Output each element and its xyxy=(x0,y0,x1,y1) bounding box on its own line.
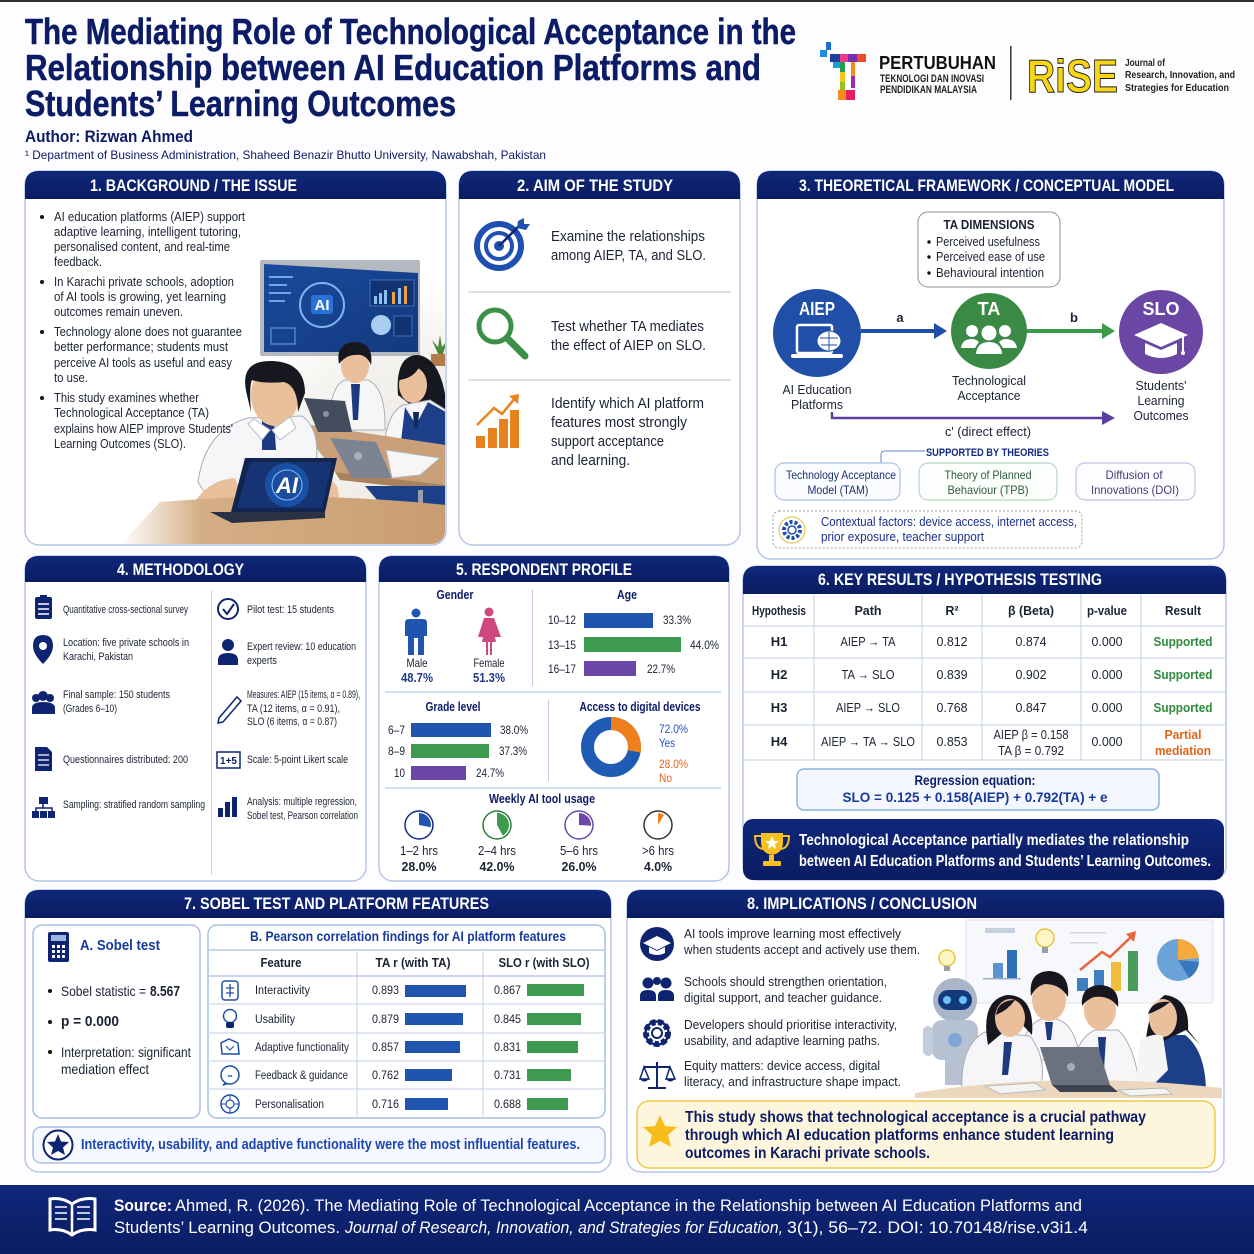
results table: H4 xyxy=(771,734,788,749)
results table xyxy=(744,594,1225,760)
header 4: 4. METHODOLOGY xyxy=(117,560,245,579)
row: adaptive functionality: Adaptive functionality xyxy=(255,1042,349,1054)
results table: 0.902 xyxy=(1016,667,1046,682)
row: adaptive functionality: 0.857 xyxy=(372,1040,399,1054)
aim text 1 xyxy=(551,229,706,264)
method: location xyxy=(33,635,189,664)
logo: Pertubuhan: TEKNOLOGI DAN INOVASI xyxy=(880,73,984,85)
influential features callout: Interactivity, usability, and adaptive functionality were the most influential features. xyxy=(81,1137,580,1153)
results table: p-value xyxy=(1087,604,1127,618)
method: scale: Scale: 5-point Likert scale xyxy=(247,754,348,766)
grade bars xyxy=(388,700,528,780)
header 8 xyxy=(627,890,1224,918)
logo: RISE journal: RiSE xyxy=(1027,50,1118,102)
bulleted text: outcomes remain uneven. xyxy=(54,304,183,319)
aim text 2 xyxy=(551,319,706,354)
row: feedback and guidance: ∞ xyxy=(228,1073,232,1080)
logo: Pertubuhan xyxy=(820,42,996,100)
node: AIEP: Platforms xyxy=(791,397,843,412)
footer: source citation: Journal of Research, Innovation, and Strategies for Education, xyxy=(344,1218,783,1237)
node: TA xyxy=(951,293,1027,403)
bulleted text: better performance; students must xyxy=(54,339,228,354)
title: The Mediating Role of Technological Acceptance in the xyxy=(25,11,796,52)
panel 1: background xyxy=(25,171,447,545)
logo: RISE journal: Strategies for Education xyxy=(1125,82,1229,94)
gender chart: Male xyxy=(406,656,428,670)
results table: mediation xyxy=(1155,743,1211,758)
node: SLO: SLO xyxy=(1142,299,1180,319)
pearson correlation table: Feature xyxy=(260,955,302,970)
method: sampling: Sampling: stratified random sampling xyxy=(63,799,205,811)
node: TA: Technological xyxy=(952,373,1026,388)
pearson correlation table: SLO r (with SLO) xyxy=(498,955,590,970)
title: Students’ Learning Outcomes xyxy=(25,83,456,124)
results table: β (Beta) xyxy=(1008,604,1054,618)
illustration: students with AI laptops: AI xyxy=(275,473,299,498)
node: TA: TA xyxy=(978,299,1000,319)
method: location: Karachi, Pakistan xyxy=(63,651,133,663)
header 6 xyxy=(743,566,1226,594)
theories heading: SUPPORTED BY THEORIES xyxy=(926,447,1049,459)
results table: 0.000 xyxy=(1092,667,1122,682)
grade bars: 8–9 xyxy=(388,744,405,758)
method: scale xyxy=(217,752,348,768)
weekly usage: 28.0% xyxy=(402,859,437,874)
logo: RISE journal: Research, Innovation, and xyxy=(1125,69,1235,81)
device access donut: 72.0% xyxy=(659,722,688,736)
method: survey: Quantitative cross-sectional survey xyxy=(63,604,188,616)
regression equation xyxy=(797,769,1159,810)
gender chart: 51.3% xyxy=(473,670,505,685)
bulleted text: adaptive learning, intelligent tutoring, xyxy=(54,224,241,239)
results table: 0.847 xyxy=(1016,700,1046,715)
implication 4 xyxy=(640,1058,901,1089)
row: interactivity: 0.867 xyxy=(494,983,521,997)
grade bars: Grade level xyxy=(426,700,480,714)
bulleted text: Technological Acceptance (TA) xyxy=(54,405,209,420)
title: Relationship between AI Education Platforms and xyxy=(25,47,761,88)
arrow a: a xyxy=(896,310,904,325)
weekly usage: 26.0% xyxy=(562,859,597,874)
contextual factors xyxy=(773,511,1082,548)
header 3: 3. THEORETICAL FRAMEWORK / CONCEPTUAL MODEL xyxy=(799,176,1174,195)
sobel test box: A. Sobel test xyxy=(80,937,160,954)
illustration: students with AI laptops xyxy=(120,260,447,545)
theory: DOI: Diffusion of xyxy=(1106,468,1163,482)
row: usability: 0.845 xyxy=(494,1012,521,1026)
row: feedback and guidance: 0.762 xyxy=(372,1068,399,1082)
weekly usage xyxy=(400,792,674,874)
theory: TPB: Theory of Planned xyxy=(944,468,1032,482)
results table: TA → SLO xyxy=(842,667,894,682)
results table: 0.000 xyxy=(1092,634,1122,649)
panel 7: sobel and features xyxy=(25,890,611,1172)
weekly usage: Weekly AI tool usage xyxy=(489,792,595,806)
row: usability: Usability xyxy=(255,1014,295,1026)
row: personalisation: 0.716 xyxy=(372,1097,399,1111)
results table: Supported xyxy=(1154,634,1213,649)
theory: DOI xyxy=(1076,463,1195,500)
results table: H3 xyxy=(771,700,787,715)
method: location: Location: five private schools in xyxy=(63,637,189,649)
implication 2: digital support, and teacher guidance. xyxy=(684,990,882,1005)
row: usability: 0.879 xyxy=(372,1012,399,1026)
row: adaptive functionality xyxy=(221,1039,578,1054)
gender chart: Female xyxy=(474,656,505,670)
conclusion box: This study shows that technological acceptance is a crucial pathway xyxy=(685,1109,1146,1126)
method: sampling xyxy=(32,797,205,818)
results table: H1 xyxy=(771,634,787,649)
panel 8: implications xyxy=(627,890,1224,1172)
method: questionnaires: Questionnaires distributed: 200 xyxy=(63,754,188,766)
footer: source citation xyxy=(0,1185,1254,1254)
aim text 3: support acceptance xyxy=(551,434,664,450)
method: survey xyxy=(35,595,188,619)
bulleted text: Technology alone does not guarantee xyxy=(54,324,242,339)
weekly usage: 1–2 hrs xyxy=(400,843,438,858)
method: scale: 1+5 xyxy=(220,756,237,767)
device access donut: 28.0% xyxy=(659,757,688,771)
bulleted text: of AI tools is growing, yet learning xyxy=(54,289,226,304)
mediation banner: Technological Acceptance partially mediates the relationship xyxy=(799,832,1189,849)
results table: 0.874 xyxy=(1016,634,1046,649)
TA dimensions box: Perceived ease of use xyxy=(936,250,1045,264)
results table: AIEP → TA → SLO xyxy=(821,734,915,749)
header 5 xyxy=(379,556,729,582)
implication 2 xyxy=(640,974,887,1005)
theory: DOI: Innovations (DOI) xyxy=(1091,483,1179,497)
results table: Supported xyxy=(1154,667,1213,682)
row: personalisation: 0.688 xyxy=(494,1097,521,1111)
results table: TA β = 0.792 xyxy=(998,743,1064,758)
node: SLO: Outcomes xyxy=(1134,408,1189,423)
method: sample: (Grades 6–10) xyxy=(63,703,117,715)
results table: R² xyxy=(945,604,959,618)
method: pilot: Pilot test: 15 students xyxy=(247,604,334,616)
age bars xyxy=(548,588,719,676)
bulleted text xyxy=(40,209,245,451)
grade bars: 10 xyxy=(394,766,405,780)
weekly usage: >6 hrs xyxy=(642,843,674,858)
theory: TAM: Technology Acceptance xyxy=(786,468,896,482)
theory: TAM: Model (TAM) xyxy=(808,483,868,497)
weekly usage: 5–6 hrs xyxy=(560,843,598,858)
results table: 0.000 xyxy=(1092,734,1122,749)
method: sample xyxy=(32,689,170,715)
footer: source citation: Students’ Learning Outcomes. xyxy=(114,1218,340,1237)
weekly usage: 42.0% xyxy=(480,859,515,874)
header 8: 8. IMPLICATIONS / CONCLUSION xyxy=(747,894,977,913)
method: measures: TA (12 items, α = 0.91), xyxy=(247,703,340,715)
panel 4: methodology xyxy=(25,556,366,881)
grade bars: 37.3% xyxy=(499,744,527,758)
method: analysis: Analysis: multiple regression, xyxy=(247,796,357,808)
bulleted text: explains how AIEP improve Students' xyxy=(54,421,233,436)
theories heading xyxy=(881,447,1049,463)
row: interactivity xyxy=(222,981,584,1000)
bulleted text: In Karachi private schools, adoption xyxy=(54,274,234,289)
header 5: 5. RESPONDENT PROFILE xyxy=(456,560,632,579)
node: SLO: Students' xyxy=(1136,378,1186,393)
device access donut: Yes xyxy=(659,736,675,750)
TA dimensions box: Perceived usefulness xyxy=(936,235,1040,249)
logo: RISE journal: Journal of xyxy=(1125,57,1165,69)
arrow b: b xyxy=(1070,310,1078,325)
pearson correlation table: TA r (with TA) xyxy=(376,955,450,970)
method: questionnaires xyxy=(35,747,188,771)
footer: source citation: Source: xyxy=(114,1196,172,1215)
implication 1: when students accept and actively use them. xyxy=(683,942,920,957)
affiliation: ¹ Department of Business Administration, Shaheed Benazir Bhutto University, Nawabshah, Pakistan xyxy=(25,148,546,162)
age bars: 16–17 xyxy=(548,662,576,676)
results table: AIEP → SLO xyxy=(836,700,900,715)
row: interactivity: Interactivity xyxy=(255,985,310,997)
theory: TAM xyxy=(775,463,900,500)
method: analysis xyxy=(218,796,358,822)
results table: Supported xyxy=(1154,700,1213,715)
gender chart xyxy=(401,588,505,685)
implication 3: Developers should prioritise interactivity, xyxy=(684,1017,897,1032)
influential features callout xyxy=(33,1127,605,1163)
arrow b xyxy=(1027,310,1115,339)
row: interactivity: 0.893 xyxy=(372,983,399,997)
weekly usage: 4.0% xyxy=(644,859,672,874)
footer: source citation: Ahmed, R. (2026). The Mediating Role of Technological Acceptance in the Relationship between AI Education Platforms and xyxy=(175,1196,1082,1215)
age bars: 13–15 xyxy=(548,638,576,652)
method: expert xyxy=(218,639,356,667)
TA dimensions box: Behavioural intention xyxy=(936,266,1044,280)
gender chart: 48.7% xyxy=(401,670,433,685)
title xyxy=(25,11,796,124)
contextual factors: Contextual factors: device access, internet access, xyxy=(821,515,1077,529)
results table: Hypothesis xyxy=(752,604,806,618)
header 3 xyxy=(757,171,1224,199)
sobel test box: 8.567 xyxy=(150,984,180,1000)
aim text 2: the effect of AIEP on SLO. xyxy=(551,338,706,354)
results table: AIEP → TA xyxy=(840,634,896,649)
node: TA: Acceptance xyxy=(958,388,1020,403)
implication 2: Schools should strengthen orientation, xyxy=(684,974,887,989)
conclusion box: through which AI education platforms enhance student learning xyxy=(685,1127,1114,1144)
aim text 3 xyxy=(551,396,704,469)
node: SLO: Learning xyxy=(1138,393,1184,408)
device access donut xyxy=(580,700,701,785)
device access donut: Access to digital devices xyxy=(580,700,701,714)
sobel test box: Interpretation: significant xyxy=(61,1044,191,1060)
icon: growth chart xyxy=(476,394,519,448)
sobel test box: p = 0.000 xyxy=(61,1014,119,1030)
illustration: students with AI laptops: AI xyxy=(314,297,330,314)
node: SLO xyxy=(1119,290,1203,423)
bulleted text: personalised content, and real-time xyxy=(54,239,230,254)
icon: magnifier xyxy=(479,310,525,356)
results table: 0.768 xyxy=(936,700,968,715)
row: usability xyxy=(224,1010,581,1028)
theory: TPB xyxy=(919,463,1057,500)
age bars: 22.7% xyxy=(647,662,675,676)
node: AIEP: AI Education xyxy=(782,382,852,397)
implication 4: literacy, and infrastructure shape impact. xyxy=(684,1074,901,1089)
pearson correlation table xyxy=(208,925,605,1118)
gender chart: Gender xyxy=(436,588,474,602)
grade bars: 24.7% xyxy=(476,766,504,780)
icon: open book xyxy=(50,1199,95,1235)
method: expert: experts xyxy=(247,655,277,667)
aim text 3: and learning. xyxy=(551,453,630,469)
age bars: 33.3% xyxy=(663,613,691,627)
sobel test box xyxy=(33,925,200,1118)
results table: AIEP β = 0.158 xyxy=(994,727,1068,742)
age bars: 44.0% xyxy=(690,638,719,652)
implication 3 xyxy=(646,1017,897,1048)
conclusion box xyxy=(637,1101,1215,1168)
mediation banner xyxy=(743,819,1224,880)
grade bars: 6–7 xyxy=(388,723,405,737)
age bars: Age xyxy=(617,588,637,602)
TA dimensions box xyxy=(918,212,1060,287)
author: Author: Rizwan Ahmed xyxy=(25,127,193,146)
sobel test box: Sobel statistic = xyxy=(61,983,146,999)
method: analysis: Sobel test, Pearson correlation xyxy=(247,810,358,822)
header 7 xyxy=(25,890,611,918)
regression equation: SLO = 0.125 + 0.158(AIEP) + 0.792(TA) + e xyxy=(842,790,1108,805)
header 1 xyxy=(25,171,446,199)
header 1: 1. BACKGROUND / THE ISSUE xyxy=(90,176,297,195)
bulleted text: AI education platforms (AIEP) support xyxy=(54,209,245,224)
header 4 xyxy=(25,556,366,582)
results table: 0.853 xyxy=(936,734,968,749)
logo: RISE journal xyxy=(1027,50,1235,102)
results table: H2 xyxy=(771,667,787,682)
panel 6: key results xyxy=(743,566,1226,880)
TA dimensions box: TA DIMENSIONS xyxy=(944,218,1034,232)
panel 5: respondent profile xyxy=(379,556,729,881)
bulleted text: perceive AI tools as useful and easy xyxy=(54,355,232,370)
bulleted text: This study examines whether xyxy=(54,390,200,405)
age bars: 10–12 xyxy=(548,613,576,627)
icon: target xyxy=(477,218,530,268)
results table: Partial xyxy=(1164,727,1202,742)
row: personalisation xyxy=(221,1095,568,1113)
row: feedback and guidance xyxy=(221,1066,571,1086)
node: AIEP xyxy=(773,289,861,412)
footer: source citation: 3(1), 56–72. DOI: 10.70148/rise.v3i1.4 xyxy=(787,1218,1088,1237)
theory: TPB: Behaviour (TPB) xyxy=(948,483,1028,497)
logo: Pertubuhan: PERTUBUHAN xyxy=(879,53,996,73)
grade bars: 38.0% xyxy=(500,723,528,737)
row: adaptive functionality: 0.831 xyxy=(494,1040,521,1054)
sobel test box: mediation effect xyxy=(61,1061,149,1077)
implication 3: usability, and adaptive learning paths. xyxy=(684,1033,880,1048)
method: measures xyxy=(218,689,360,728)
bulleted text: to use. xyxy=(54,370,88,385)
device access donut: No xyxy=(659,771,672,785)
regression equation: Regression equation: xyxy=(914,773,1036,788)
implication 1 xyxy=(640,926,920,961)
method: expert: Expert review: 10 education xyxy=(247,641,356,653)
bulleted text: feedback. xyxy=(54,254,102,269)
row: personalisation: Personalisation xyxy=(255,1099,324,1111)
results table: Result xyxy=(1165,604,1202,618)
results table: 0.839 xyxy=(936,667,968,682)
method: measures: Measures: AIEP (15 items, α = 0.89), xyxy=(247,689,360,701)
header 2: 2. AIM OF THE STUDY xyxy=(517,176,674,195)
method: measures: SLO (6 items, α = 0.87) xyxy=(247,716,337,728)
node: AIEP: AIEP xyxy=(799,299,835,319)
row: feedback and guidance: Feedback & guidance xyxy=(255,1070,348,1082)
contextual factors: prior exposure, teacher support xyxy=(821,530,984,544)
results table: 0.000 xyxy=(1092,700,1122,715)
method: pilot xyxy=(218,599,334,619)
implication 1: AI tools improve learning most effectively xyxy=(684,926,901,941)
conclusion box: outcomes in Karachi private schools. xyxy=(685,1145,930,1162)
weekly usage: 2–4 hrs xyxy=(478,843,516,858)
header 6: 6. KEY RESULTS / HYPOTHESIS TESTING xyxy=(818,570,1102,589)
arrow c prime xyxy=(832,411,1115,439)
aim text 1: Examine the relationships xyxy=(551,229,705,245)
logo: Pertubuhan: PENDIDIKAN MALAYSIA xyxy=(880,84,977,96)
aim text 2: Test whether TA mediates xyxy=(551,319,704,335)
header 2 xyxy=(459,171,740,199)
pearson correlation table: B. Pearson correlation findings for AI platform features xyxy=(250,928,566,944)
results table: 0.812 xyxy=(936,634,968,649)
aim text 1: among AIEP, TA, and SLO. xyxy=(551,248,706,264)
bulleted text: Learning Outcomes (SLO). xyxy=(54,436,186,451)
method: sample: Final sample: 150 students xyxy=(63,689,170,701)
arrow c prime: c' (direct effect) xyxy=(945,424,1031,439)
row: feedback and guidance: 0.731 xyxy=(494,1068,521,1082)
panel 2: aim of the study xyxy=(459,171,740,545)
illustration: students and robot xyxy=(915,920,1222,1098)
arrow a xyxy=(861,310,947,339)
header 7: 7. SOBEL TEST AND PLATFORM FEATURES xyxy=(184,894,489,913)
aim text 3: Identify which AI platform xyxy=(551,396,704,412)
results table: Path xyxy=(854,604,882,618)
aim text 3: features most strongly xyxy=(551,415,688,431)
implication 4: Equity matters: device access, digital xyxy=(684,1058,880,1073)
panel 3: conceptual model xyxy=(757,171,1224,559)
